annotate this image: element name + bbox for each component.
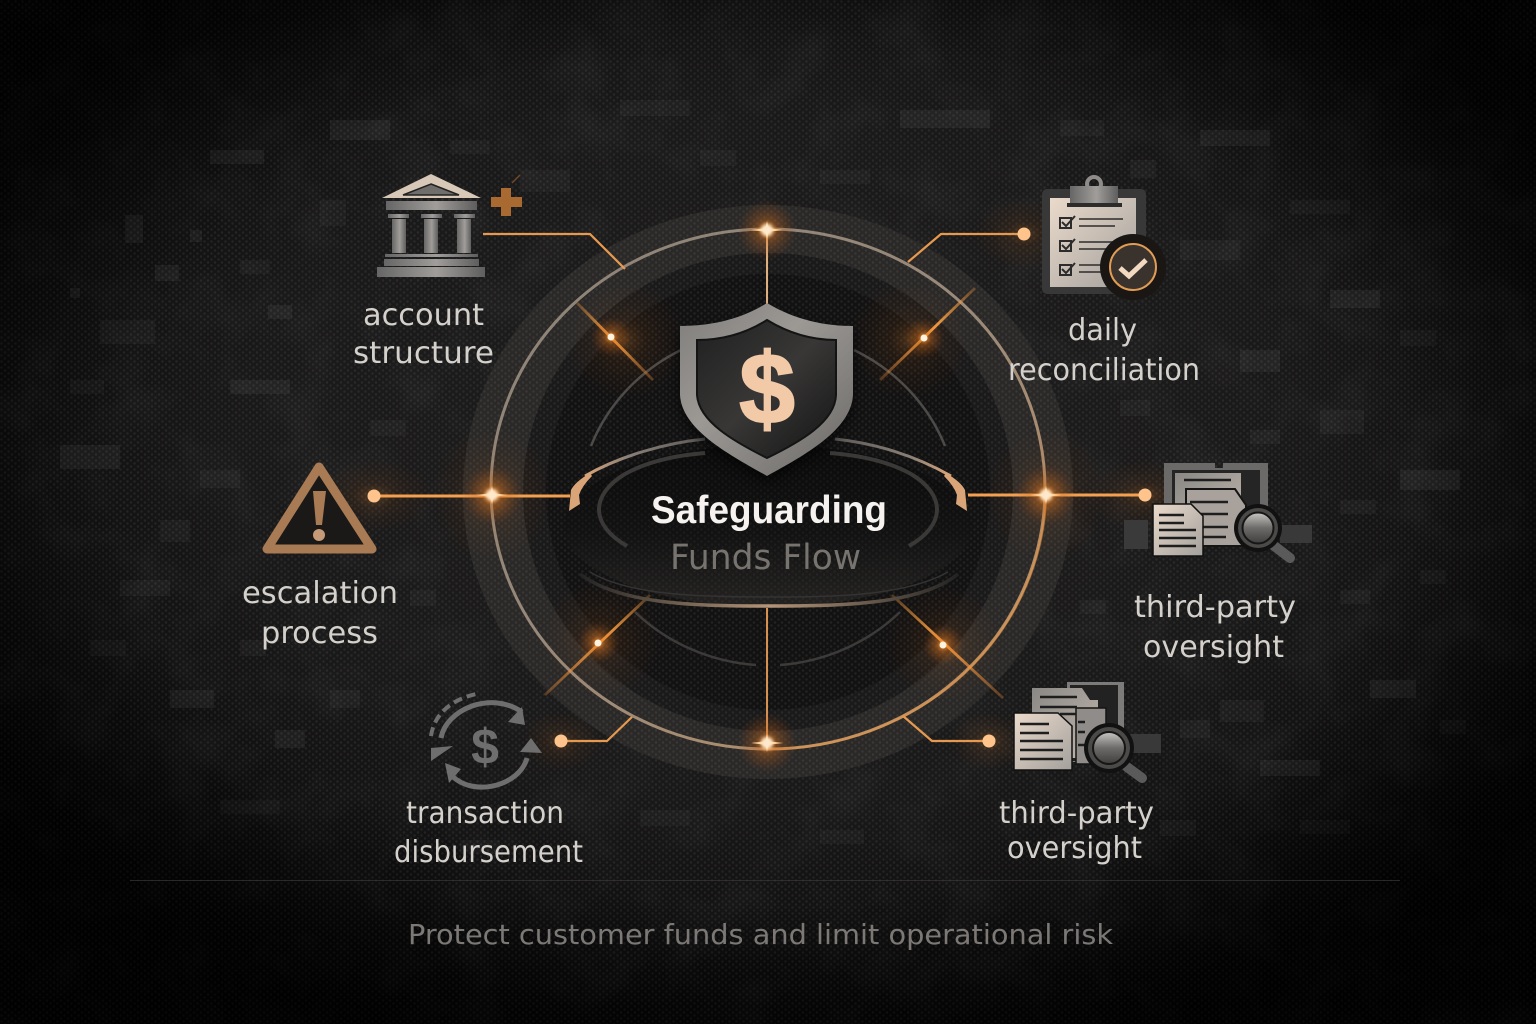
icon: circular transaction arrows with dollar [431,694,542,787]
icon: shield with dollar [680,303,853,482]
label: third-party oversight bottom [999,796,1154,866]
connector: third-party oversight right [968,465,1152,525]
label: daily reconciliation: reconciliation [1008,353,1200,388]
label: daily reconciliation [1008,313,1200,388]
icon: clipboard with check badge [1042,177,1166,300]
connector: top vertical [737,200,797,305]
icon: warning triangle [267,467,372,549]
label: third-party oversight right [1134,590,1296,665]
label: escalation process: process [261,616,378,651]
label: daily reconciliation: daily [1068,313,1137,348]
connector: daily reconciliation [880,228,1030,380]
connector: transaction disbursement [545,595,650,748]
connector: escalation process [368,465,570,525]
label: account structure: account [363,298,484,333]
ambient orange glows [314,198,1205,771]
footer divider and tagline: Protect customer funds and limit operational risk [408,918,1114,951]
label: third-party oversight right: oversight [1143,630,1284,665]
label: third-party oversight bottom: oversight [1007,831,1142,866]
label: account structure: structure [353,336,494,371]
label: transaction disbursement: transaction [406,796,564,831]
icon: bank with plus [377,174,522,277]
icon: shield with dollar: $ [739,333,795,445]
label: escalation process [242,576,398,651]
panel: concentric ring system [463,205,1073,779]
icon: documents and magnifier bottom [1014,682,1161,778]
connector: account structure [483,234,653,380]
label: escalation process: escalation [242,576,398,611]
title [651,489,887,578]
icon: circular transaction arrows with dollar: $ [471,719,499,775]
label: account structure [353,298,494,371]
icon: documents and magnifier right [1124,463,1312,558]
connector: third-party oversight bottom [892,595,1003,748]
label: third-party oversight right: third-party [1134,590,1296,625]
panel: central disc [564,439,972,607]
label: transaction disbursement [394,796,583,870]
title: Safeguarding [651,489,887,532]
label: transaction disbursement: disbursement [394,835,583,870]
label: third-party oversight bottom: third-party [999,796,1154,831]
title: Funds Flow [670,538,861,578]
connector: bottom vertical [737,608,797,773]
